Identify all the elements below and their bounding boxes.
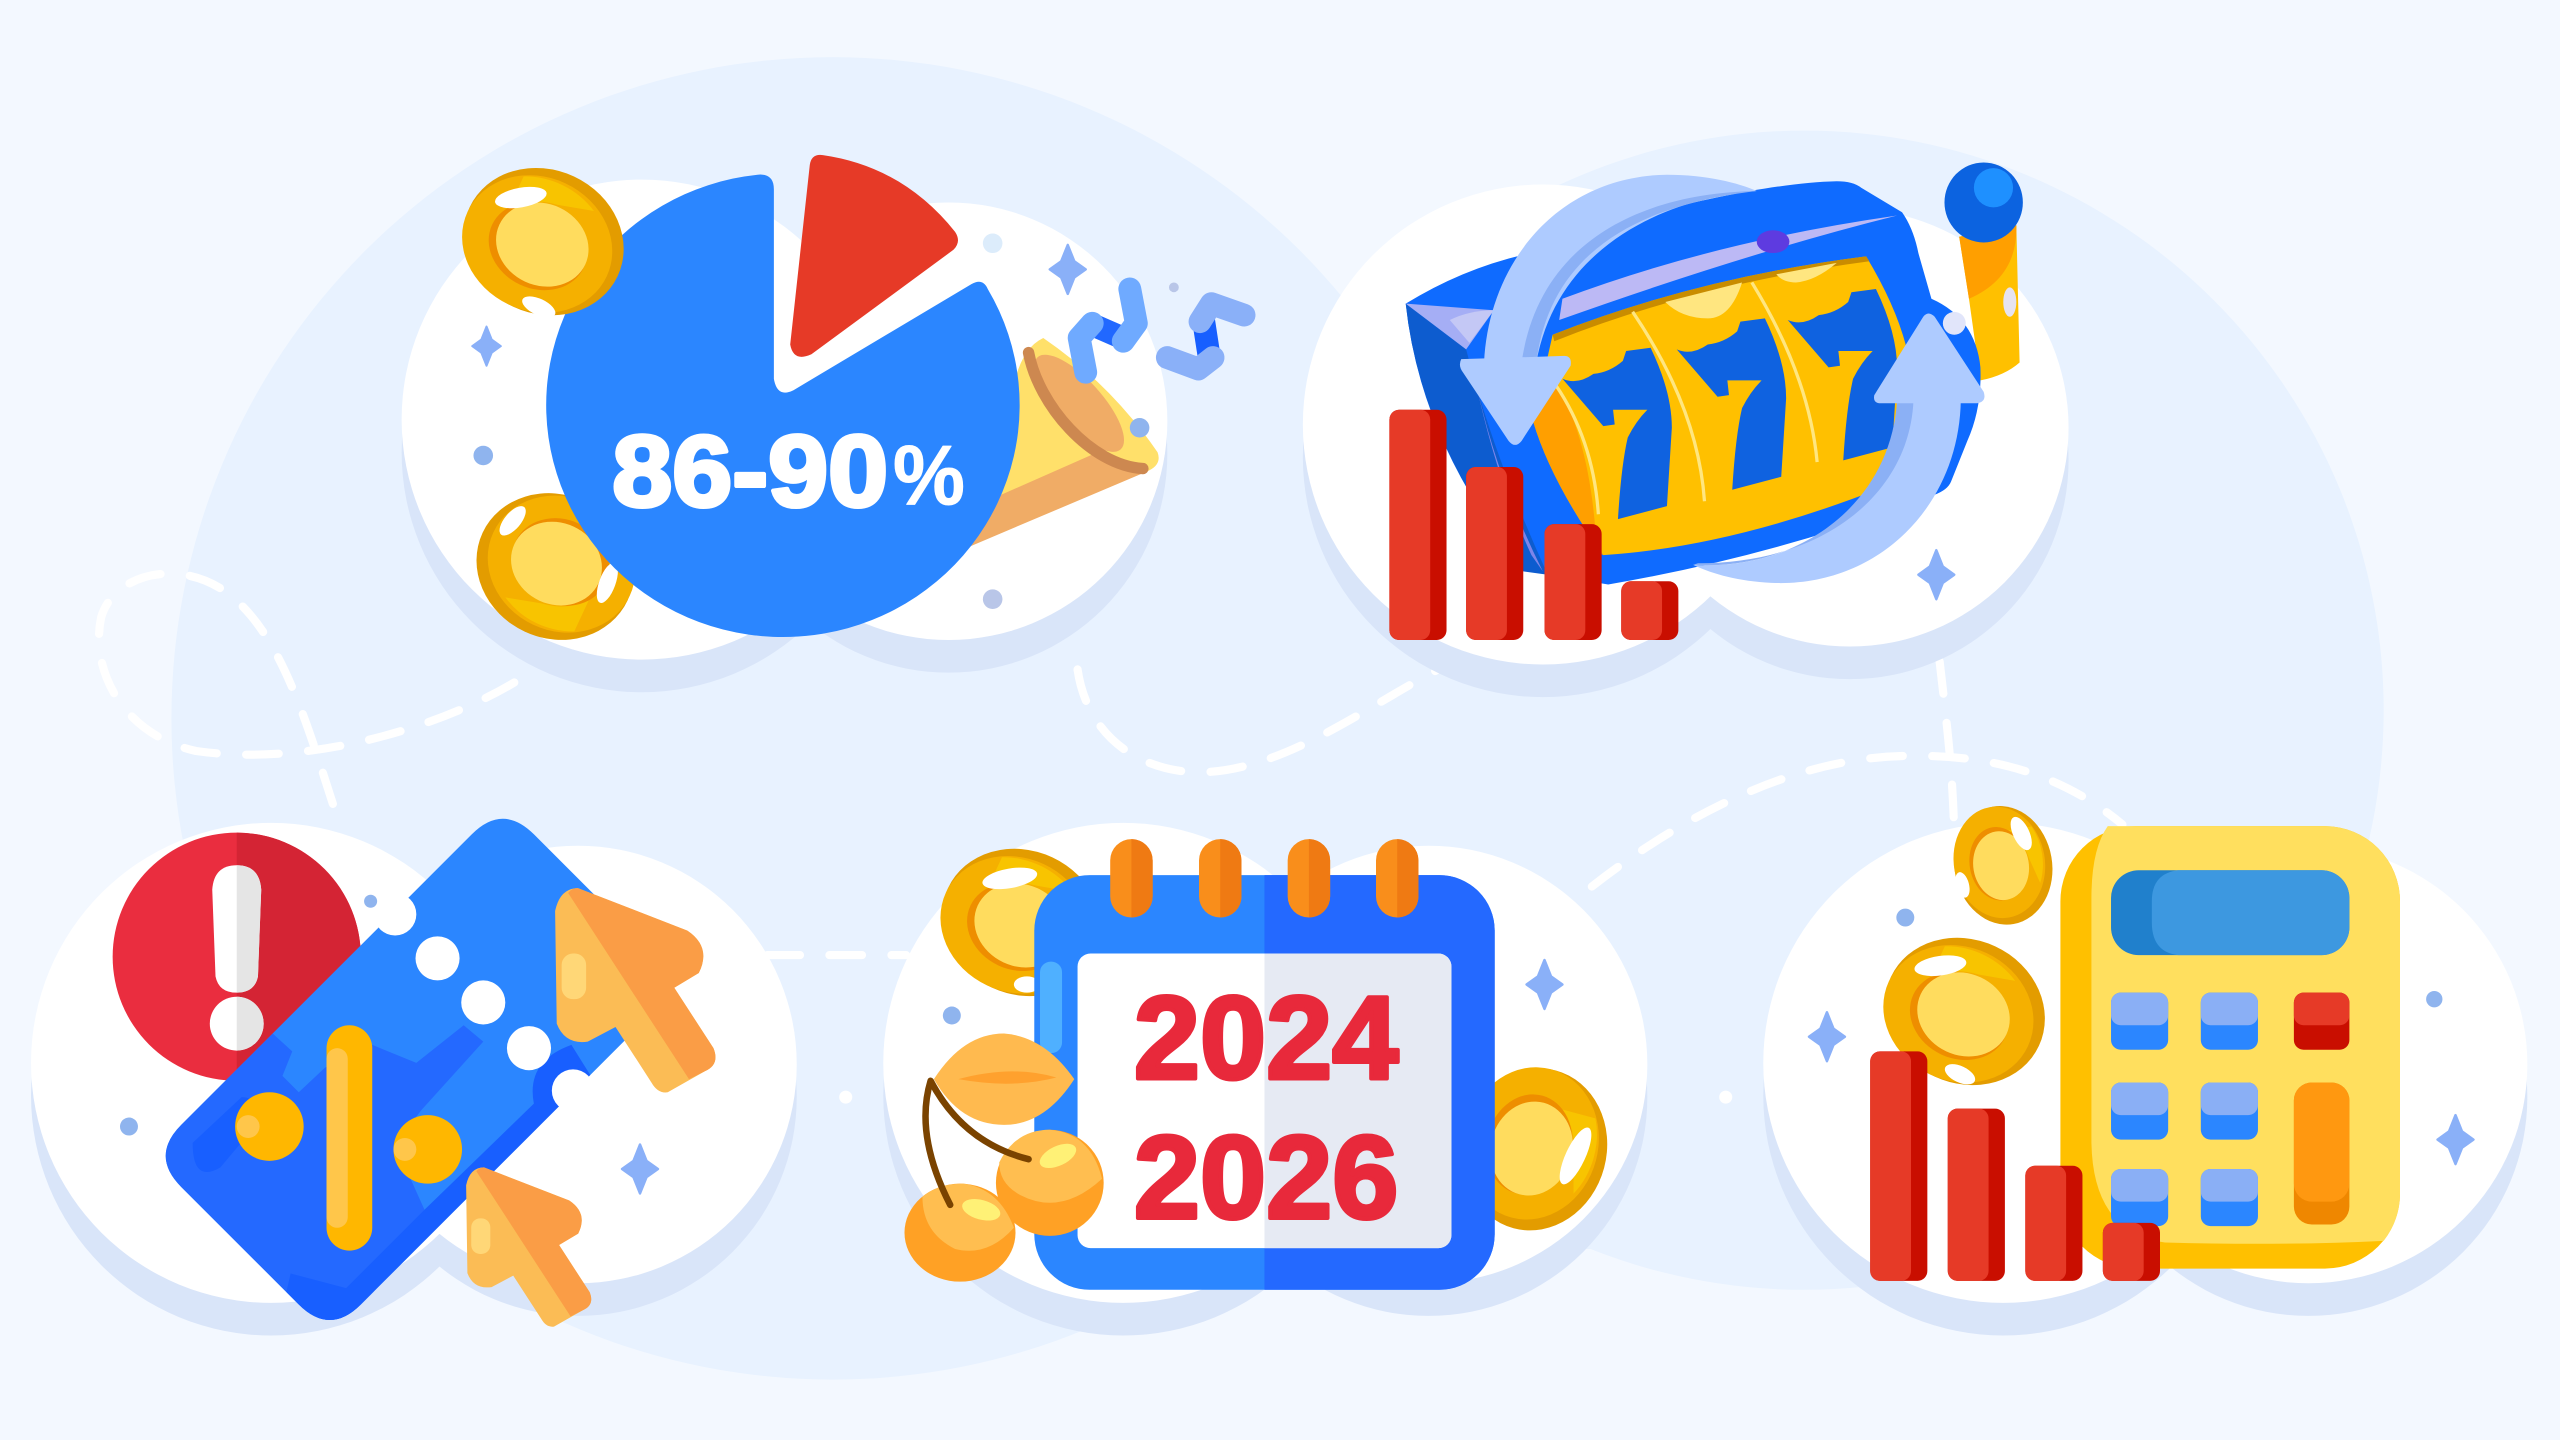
panel: discount ticket	[98, 819, 715, 1355]
icon: lever	[1944, 162, 2023, 380]
panel: pie chart 86-90%	[439, 142, 1244, 665]
year range text: 2026	[1134, 1112, 1398, 1243]
icon: gold coin right	[1444, 1052, 1625, 1247]
bar chart: falling bars	[1389, 410, 1678, 640]
calendar body	[1034, 875, 1495, 1290]
pie chart: blue slice	[546, 175, 1020, 637]
panel: calculator	[1861, 798, 2400, 1281]
white clouds	[31, 180, 2527, 1303]
ticket perforations	[374, 893, 594, 1112]
ticket body	[166, 819, 667, 1320]
arrow: circular up	[1693, 313, 1984, 583]
dashed connector paths	[99, 574, 2122, 955]
icon: gold coin top	[439, 142, 648, 341]
slot machine side face	[1406, 304, 1548, 575]
icon: alert circle	[113, 833, 361, 1081]
reels window	[1533, 256, 1913, 555]
pie chart: red slice	[790, 155, 958, 357]
decorative dots	[120, 233, 2442, 1136]
icon: large cursor	[555, 888, 715, 1092]
calendar page	[1078, 953, 1451, 1248]
decorative sparkles	[472, 245, 2473, 1193]
icon: gold coin bottom	[452, 468, 658, 665]
slot machine body	[1406, 181, 1981, 584]
icon: gold coin large	[1861, 912, 2069, 1111]
bar chart: falling bars	[1870, 1051, 2160, 1281]
calendar rings	[1110, 839, 1418, 918]
icon: small cursor	[466, 1167, 591, 1327]
year range text	[1134, 972, 1398, 1243]
icon: cherries	[904, 1033, 1104, 1282]
ticket lower shade	[166, 1025, 483, 1320]
top light stripe	[1559, 216, 1897, 320]
ticket edge shade	[193, 1045, 612, 1331]
calculator buttons	[2111, 993, 2349, 1226]
hub dot	[1943, 312, 1966, 335]
calculator body	[2060, 826, 2400, 1269]
percent sign	[235, 1025, 462, 1251]
icon: party horn	[965, 338, 1159, 549]
icon: confetti ribbons	[1079, 289, 1244, 372]
arrow: circular down	[1460, 175, 1757, 445]
panel: calendar 2024-2026	[904, 823, 1625, 1290]
panel: slot machine	[1389, 162, 2023, 640]
purple button	[1757, 230, 1789, 253]
background blobs	[171, 57, 2384, 1380]
icon: gold coin small	[1945, 798, 2062, 932]
percentage label: %	[893, 427, 965, 522]
calculator screen	[2111, 870, 2349, 955]
year range text: 2024	[1134, 972, 1398, 1103]
percentage label: 86-90	[612, 415, 888, 528]
icon: gold coin left	[918, 823, 1126, 1022]
cloud shadows	[31, 212, 2527, 1336]
